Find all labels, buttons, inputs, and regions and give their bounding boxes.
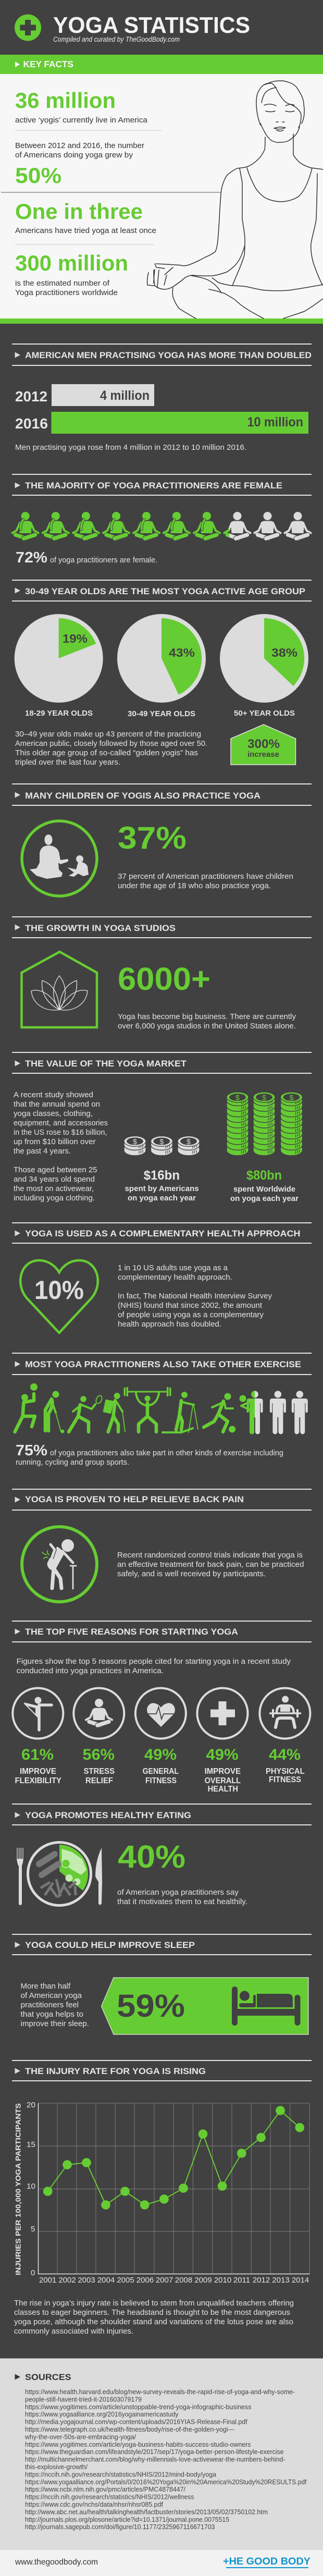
stat: 80bn: on yoga each year: [230, 1194, 299, 1203]
text: market paragraph: up from $10 billion over: [14, 1137, 96, 1146]
text: age paragraph: tripled over the last four years.: [15, 758, 120, 767]
source list: people-still-havent-tried-it-201603079179: [25, 2396, 142, 2403]
reason: overall health: 49%: [206, 1746, 239, 1763]
source list: https://www.theguardian.com/lifeandstyle/2017/sep/17/yoga-better-person-lifestyle-exercise: [25, 2448, 283, 2456]
text: worldwide: Yoga practitioners worldwide: [15, 288, 118, 297]
text: worldwide: is the estimated number of: [15, 279, 110, 288]
x axis labels: 2001: [39, 2276, 56, 2285]
source list: https://www.yogaalliance.org/2016yogainamericastudy: [25, 2411, 179, 2418]
x axis labels: 2014: [292, 2276, 309, 2285]
icon: heart with 10 percent: 10%: [34, 1275, 84, 1305]
text: complementary: 1 in 10 US adults use yoga as a: [118, 1264, 228, 1272]
stat: 37 percent: 37%: [118, 820, 187, 855]
x axis labels: 2006: [136, 2276, 154, 2285]
text: age paragraph: This older age group of so-called “golden yogis” has: [15, 749, 198, 757]
heading: american men: AMERICAN MEN PRACTISING YOGA HAS MORE THAN DOUBLED: [25, 350, 312, 360]
x axis labels: 2004: [97, 2276, 115, 2285]
reason: general fitness: [135, 1688, 186, 1785]
heading: age group: [12, 580, 312, 602]
text: growth: [15, 141, 144, 160]
y axis labels: 5: [31, 2225, 35, 2234]
heading: majority female: [12, 474, 312, 496]
source list: this-explosive-growth/: [25, 2463, 88, 2471]
icon: plate with cutlery: [17, 1842, 102, 1906]
stat: one in three: One in three: [15, 199, 143, 224]
icon: logo plus: [15, 15, 41, 41]
text: back pain: [117, 1551, 304, 1578]
heading: healthy eating: YOGA PROMOTES HEALTHY EATING: [25, 1810, 191, 1820]
text: studios: over 6,000 yoga studios in the United States alone.: [118, 1022, 296, 1031]
icon: heart with 10 percent: [20, 1260, 98, 1333]
text: injury paragraph: [14, 2299, 294, 2336]
stat: 75 percent: of yoga practitioners also take part in other kinds of exercise including: [50, 1449, 283, 1457]
source list: https://www.telegraph.co.uk/health-fitness/body/rise-of-the-golden-yogi---: [25, 2426, 234, 2433]
text: sleep: of American yoga: [21, 1991, 82, 2000]
pie chart: 18-29: 18-29 YEAR OLDS: [25, 709, 93, 718]
text: growth: Between 2012 and 2016, the number: [15, 141, 144, 150]
text: complementary: health approach has doubled.: [118, 1320, 221, 1329]
heading: healthy eating: [12, 1804, 312, 1825]
icon: green coin stacks: $: [235, 1094, 240, 1102]
bar: 2012: [15, 384, 154, 406]
text: sleep: that yoga helps to: [21, 2010, 83, 2019]
reason: physical fitness: 44%: [269, 1746, 301, 1763]
pie chart: 30-49: 43%: [169, 646, 195, 659]
heading: market: THE VALUE OF THE YOGA MARKET: [25, 1059, 187, 1069]
stat: 6000+: 6000+: [118, 961, 210, 997]
text: children: 37 percent of American practitioners have children: [118, 872, 293, 881]
source list: why-the-over-50s-are-embracing-yoga/: [24, 2433, 136, 2440]
panel: sources: [0, 2358, 323, 2550]
bar chart: men practising: [15, 384, 308, 434]
text: market paragraph: yoga classes, clothing,: [14, 1109, 93, 1118]
reason: overall health: [197, 1688, 248, 1794]
text: market paragraph: Those aged between 25: [14, 1166, 97, 1174]
source list: http://media.yogajournal.com/wp-content/uploads/2016YIAS-Release-Final.pdf: [25, 2419, 247, 2426]
stat: 75 percent: 75%: [16, 1442, 47, 1459]
text: market paragraph: including yoga clothing.: [14, 1194, 95, 1203]
icon: figure with back pain: [22, 1527, 97, 1602]
icon: green coin stacks: $: [290, 1094, 294, 1102]
stat: 72 percent: [16, 549, 157, 566]
callout: 300 percent increase: [231, 725, 296, 765]
source list: http://journals.sagepub.com/doi/figure/10.1177/2325967116671703: [25, 2523, 215, 2531]
text: back pain: Recent randomized control trials indicate that yoga is: [117, 1551, 303, 1560]
icon: green coin stacks: [227, 1092, 302, 1156]
text: growth: of Americans doing yoga grew by: [15, 151, 133, 160]
text: tried yoga: Americans have tried yoga at least once: [15, 226, 156, 235]
x axis labels: 2013: [272, 2276, 290, 2285]
callout: 300 percent increase: increase: [247, 750, 279, 759]
heading: american men: [12, 344, 312, 366]
text: sleep: More than half: [21, 1982, 71, 1991]
icon: studio house with lotus: [22, 952, 97, 1027]
text: market paragraph: A recent study showed: [14, 1090, 93, 1099]
x axis labels: 2002: [58, 2276, 76, 2285]
reason: overall health: HEALTH: [208, 1785, 238, 1794]
source list: https://www.cdc.gov/nchs/data/nhsr/nhsr085.pdf: [25, 2501, 163, 2508]
y axis labels: 10: [27, 2182, 35, 2191]
text: injury paragraph: yoga pose, although the shoulder stand and variations of the lotus pose are also: [14, 2317, 293, 2326]
x axis labels: 2008: [175, 2276, 192, 2285]
text: sleep: [21, 1982, 89, 2028]
line chart: injury rate: [14, 2101, 309, 2285]
reason: overall health: IMPROVE: [205, 1767, 241, 1776]
source list: https://www.yogitimes.com/article/unstoppable-trend-yoga-infographic-business: [25, 2403, 251, 2411]
pie chart: 18-29: 19%: [63, 632, 88, 645]
text: eating: that it motivates them to eat healthily.: [117, 1897, 247, 1906]
bar: 2012: 2012: [15, 388, 47, 404]
stat: 80bn: $80bn: [246, 1168, 282, 1183]
reason: flexibility: IMPROVE: [20, 1767, 56, 1776]
bar: 2016: 2016: [15, 415, 48, 432]
heading: sleep: [12, 1934, 312, 1955]
reason: stress relief: RELIEF: [85, 1776, 113, 1785]
pie chart: 30-49: [117, 614, 206, 718]
reason: physical fitness: FITNESS: [269, 1775, 301, 1784]
panel: key facts: [0, 55, 323, 324]
icon: adult and child meditating: [22, 821, 97, 896]
stat: 36 million: 36 million: [15, 88, 116, 113]
heading: market: [12, 1052, 312, 1074]
pie chart: 50+: [220, 614, 308, 718]
x axis labels: 2010: [214, 2276, 231, 2285]
heading: injury rate: THE INJURY RATE FOR YOGA IS RISING: [25, 2066, 206, 2076]
y axis labels: 15: [27, 2140, 35, 2149]
heading: age group: 30-49 YEAR OLDS ARE THE MOST YOGA ACTIVE AGE GROUP: [25, 586, 305, 596]
reason: flexibility: [13, 1688, 63, 1785]
text: age paragraph: 30–49 year olds make up 43 percent of the practicing: [15, 730, 201, 739]
stat: 75 percent: [16, 1442, 283, 1467]
x axis labels: 2011: [233, 2276, 250, 2285]
text: studios: [118, 1012, 296, 1031]
reason: stress relief: [73, 1688, 124, 1785]
reason: stress relief: STRESS: [83, 1767, 115, 1776]
bar: 2012: 4 million: [100, 388, 150, 403]
text: complementary: In fact, The National Health Interview Survey: [118, 1292, 272, 1301]
text: injury paragraph: The rise in yoga’s injury rate is believed to stem from unqualified teachers offering: [14, 2299, 294, 2308]
reason: flexibility: FLEXIBILITY: [15, 1776, 61, 1785]
text: children: [118, 872, 293, 890]
reason: flexibility: 61%: [21, 1746, 54, 1763]
y axis labels: [27, 2101, 35, 2277]
icon row: meditators 72 percent: [13, 512, 311, 538]
reason: general fitness: FITNESS: [145, 1776, 177, 1785]
x axis labels: 2009: [194, 2276, 212, 2285]
x axis labels: 2005: [117, 2276, 134, 2285]
text: back pain: an effective treatment for back pain, can be practiced: [117, 1560, 304, 1569]
icon: green coin stacks: $: [262, 1094, 266, 1102]
stat: 50%: 50%: [15, 163, 61, 188]
stat: 72 percent: of yoga practitioners are female.: [50, 556, 157, 565]
heading: sleep: YOGA COULD HELP IMPROVE SLEEP: [25, 1940, 195, 1950]
stat: 16bn: on yoga each year: [128, 1194, 196, 1203]
heading: children: MANY CHILDREN OF YOGIS ALSO PRACTICE YOGA: [25, 791, 260, 801]
text: reasons intro: Figures show the top 5 reasons people cited for starting yoga in a recent study: [17, 1657, 291, 1666]
y axis title: INJURIES PER 100,000 YOGA PARTICIPANTS: [14, 2103, 22, 2275]
text: studios: Yoga has become big business. There are currently: [118, 1012, 296, 1021]
source list: http://journals.plos.org/plosone/article?id=10.1371/journal.pone.0075515: [25, 2516, 229, 2523]
data line: [48, 2111, 300, 2205]
text: back pain: safely, and is well received by participants.: [117, 1569, 266, 1578]
x axis labels: 2003: [78, 2276, 95, 2285]
source list: https://www.yogaalliance.org/Portals/0/2016%20Yoga%20in%20America%20Study%20RESULTS.pdf: [25, 2479, 307, 2486]
icon: bed: [232, 1986, 300, 2026]
source list: https://nccih.nih.gov/research/statistics/NHIS/2012/wellness: [25, 2494, 194, 2501]
text: age paragraph: American public, closely followed by those aged over 50.: [15, 739, 207, 748]
text: complementary: [118, 1264, 272, 1329]
text: market paragraph: that the annual spend on: [14, 1100, 100, 1109]
text: market paragraph: in the US rose to $16 billion,: [14, 1128, 107, 1137]
source list: https://www.health.harvard.edu/blog/new-survey-reveals-the-rapid-rise-of-yoga-and-why-some-: [25, 2388, 295, 2396]
heading: sources: SOURCES: [25, 2372, 71, 2382]
source list: https://www.yogitimes.com/article/yoga-business-habits-success-studio-owners: [25, 2441, 251, 2448]
y axis labels: 20: [27, 2101, 35, 2109]
text: worldwide: [15, 279, 118, 297]
text: eating: of American yoga practitioners say: [117, 1888, 239, 1897]
heading: children: [12, 783, 312, 806]
reason: overall health: OVERALL: [205, 1776, 241, 1785]
heading: injury rate: [12, 2060, 312, 2081]
text: age paragraph: [15, 730, 207, 767]
text: yogis: active ‘yogis’ currently live in America: [15, 116, 148, 125]
heading: other exercise: MOST YOGA PRACTITIONERS ALSO TAKE OTHER EXERCISE: [25, 1359, 301, 1369]
heading: majority female: THE MAJORITY OF YOGA PRACTITIONERS ARE FEMALE: [25, 481, 282, 490]
icon: grey coin stacks: $: [160, 1137, 164, 1146]
x axis labels: [39, 2276, 309, 2285]
stat: 16bn: spent by Americans: [125, 1184, 199, 1193]
pie chart: 30-49: 30-49 YEAR OLDS: [128, 709, 195, 718]
stat: 300 million: 300 million: [15, 251, 128, 275]
text: sleep: practitioners feel: [21, 2001, 79, 2009]
text: men rose: Men practising yoga rose from 4 million in 2012 to 10 million 2016.: [15, 443, 246, 452]
bar: 2016: 10 million: [247, 415, 303, 430]
text: injury paragraph: classes to eager beginners. The headstand is thought to be the most dangerous: [14, 2308, 290, 2317]
stat: 72 percent: 72%: [16, 549, 47, 566]
stat: 80bn: [230, 1168, 299, 1203]
header: [0, 0, 323, 55]
stat: 40 percent: 40%: [118, 1839, 185, 1874]
source list: https://nccih.nih.gov/research/statistics/NHIS/2012/mind-body/yoga: [25, 2471, 216, 2478]
stat: 75 percent: running, cycling and group sports.: [16, 1458, 129, 1467]
reason: general fitness: 49%: [144, 1746, 177, 1763]
footer: [0, 2550, 323, 2576]
heading: complementary health: YOGA IS USED AS A COMPLEMENTARY HEALTH APPROACH: [25, 1229, 300, 1238]
footer url: www.thegoodbody.com: [15, 2558, 98, 2567]
text: complementary: complementary health approach.: [118, 1273, 232, 1282]
illustration: meditating woman: [147, 81, 323, 318]
text: market paragraph: [14, 1090, 108, 1203]
source list: https://www.ncbi.nlm.nih.gov/pmc/articles/PMC4878447/: [25, 2486, 185, 2493]
text: eating: [117, 1888, 247, 1906]
reason: physical fitness: [259, 1688, 310, 1784]
data points: [43, 2106, 304, 2210]
heading: back pain: YOGA IS PROVEN TO HELP RELIEVE BACK PAIN: [25, 1494, 244, 1504]
icon row: exercise figures: [15, 1383, 308, 1434]
heading: studios: THE GROWTH IN YOGA STUDIOS: [25, 923, 176, 933]
x axis labels: 2012: [253, 2276, 270, 2285]
icon: grey coin stacks: [124, 1136, 200, 1156]
text: complementary: (NHIS) found that since 2002, the amount: [118, 1301, 263, 1310]
reason: general fitness: GENERAL: [143, 1767, 179, 1776]
text: market paragraph: the past 4 years.: [14, 1147, 71, 1156]
footer logo: +HE GOOD BODY: [223, 2556, 310, 2567]
reason: physical fitness: PHYSICAL: [266, 1767, 305, 1776]
heading: key facts: KEY FACTS: [23, 59, 73, 69]
text: market paragraph: and 34 years old spend: [14, 1175, 95, 1184]
icon: grey coin stacks: $: [133, 1137, 137, 1146]
title: YOGA STATISTICS: [53, 13, 250, 38]
callout: 300 percent increase: 300%: [247, 737, 280, 751]
text: sleep: improve their sleep.: [21, 2019, 89, 2028]
pie chart: 50+: 50+ YEAR OLDS: [234, 709, 295, 718]
callout: 59 percent sleep: [101, 1978, 308, 2034]
heading: top five reasons: THE TOP FIVE REASONS FOR STARTING YOGA: [25, 1627, 238, 1637]
y axis labels: 0: [31, 2268, 35, 2277]
icon: grey coin stacks: $: [187, 1137, 191, 1146]
heading: back pain: [12, 1489, 312, 1511]
text: market paragraph: the most on activewear,: [14, 1184, 94, 1193]
text: injury paragraph: commonly associated with injuries.: [14, 2327, 133, 2336]
heading: top five reasons: [12, 1621, 312, 1642]
stat: 16bn: $16bn: [144, 1168, 180, 1183]
heading: other exercise: [12, 1353, 312, 1375]
source list: http://www.abc.net.au/health/talkinghealth/factbuster/stories/2013/05/02/3750102.htm: [25, 2508, 268, 2516]
text: reasons intro: [17, 1657, 291, 1675]
pie chart: 50+: 38%: [271, 646, 297, 659]
source list: http://multichannelmerchant.com/blog/why-millennials-love-activewear-the-numbers-behind-: [25, 2456, 285, 2463]
subtitle: Compiled and curated by TheGoodBody.com: [53, 35, 180, 43]
stat: 80bn: spent Worldwide: [233, 1185, 295, 1194]
x axis labels: 2007: [156, 2276, 173, 2285]
text: market paragraph: equipment, and accessories: [14, 1119, 108, 1127]
heading: complementary health: [12, 1222, 312, 1244]
pie chart: 18-29: [15, 614, 103, 718]
figures: three standing men: [241, 1391, 308, 1434]
stat: 16bn: [125, 1168, 199, 1203]
reason: stress relief: 56%: [82, 1746, 115, 1763]
text: complementary: of people using yoga as a complementary: [118, 1310, 264, 1319]
text: reasons intro: conducted into yoga practices in America.: [17, 1666, 164, 1675]
bar: 2016: [15, 412, 308, 434]
text: children: under the age of 18 who also practice yoga.: [118, 881, 271, 890]
heading: studios: [12, 916, 312, 938]
callout: 59 percent sleep: 59%: [117, 1988, 185, 2023]
source list: [24, 2388, 307, 2531]
